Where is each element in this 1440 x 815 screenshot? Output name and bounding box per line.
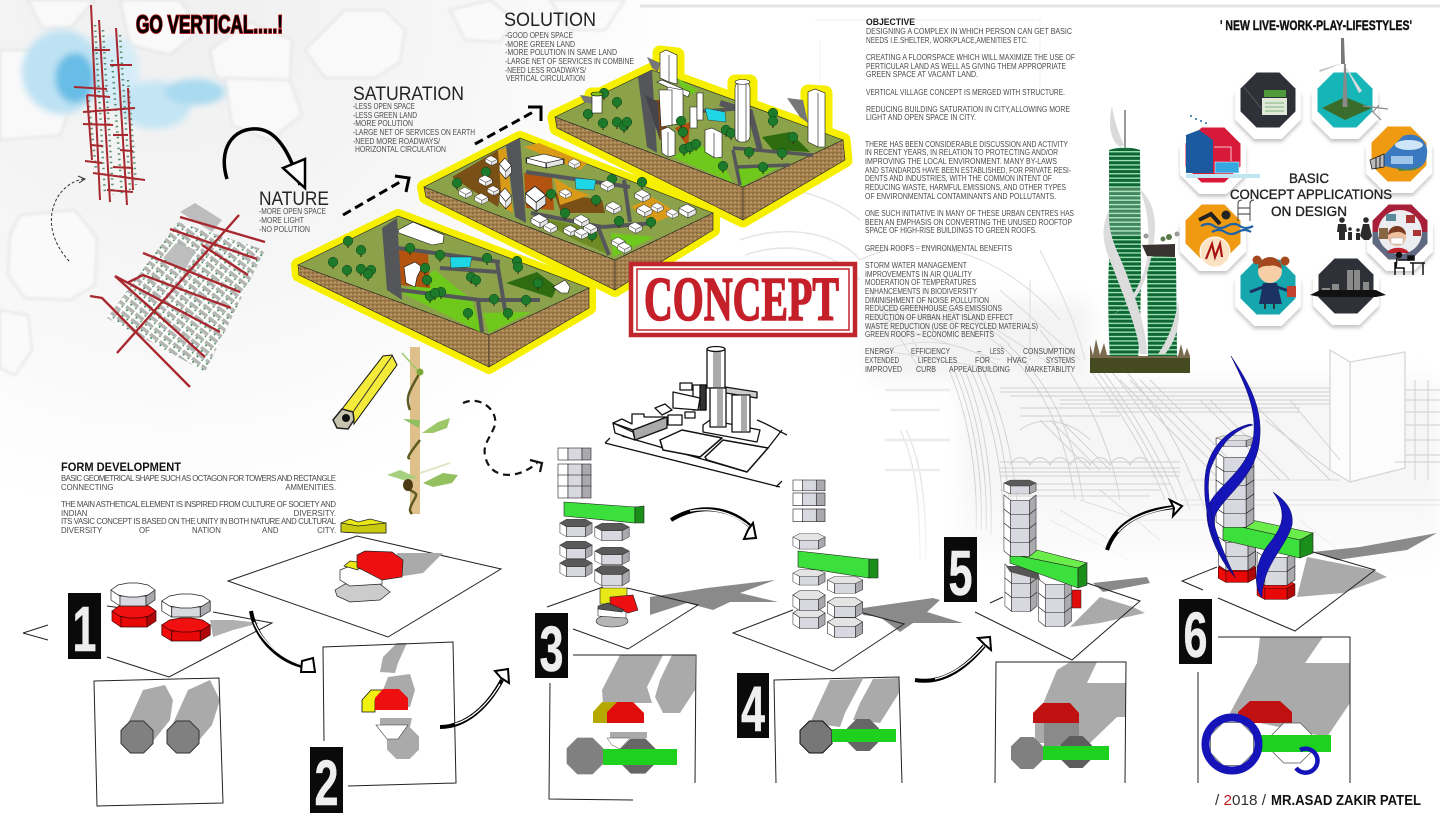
text block: objective: MODERATION OF TEMPERATURES (865, 278, 976, 287)
text: solution: -MORE GREEN LAND (505, 40, 575, 49)
footer: credit: / 2018 / (1215, 793, 1267, 809)
text block: objective: LESS (990, 347, 1004, 356)
text: form development: ITS VASIC CONCEPT IS BASED ON THE UNITY IN BOTH NATURE AND CULTURAL (61, 517, 337, 526)
text: form development: DIVERSITY (61, 526, 103, 535)
dashed arrow: saturation to solution (475, 107, 541, 144)
step 4 massing (733, 480, 963, 671)
site block 3: solution (555, 50, 845, 220)
text block: objective: THERE HAS BEEN CONSIDERABLE DISCUSSION AND ACTIVITY (865, 140, 1069, 149)
text: nature: -MORE LIGHT (259, 216, 304, 225)
text: form development: FORM DEVELOPMENT (61, 460, 182, 474)
text block: objective: SYSTEMS (1046, 356, 1075, 365)
text: form development: CITY. (317, 526, 336, 535)
text block: objective: EXTENDED (865, 356, 899, 365)
heading: basic concept applications on design: BASIC (1289, 171, 1329, 186)
stamp: concept (631, 264, 855, 335)
text block: objective: CREATING A FLOORSPACE WHICH WILL MAXIMIZE THE USE OF (866, 53, 1075, 62)
text block: objective: BEEN AN EMPHASIS ON CONVERTING THE UNUSED ROOFTOP (865, 218, 1072, 227)
text: form development: BASIC GEOMETRICAL SHAPE SUCH AS OCTAGON FOR TOWERS AND RECTANGLE (61, 474, 336, 483)
icon: octagon 1 green sign (1235, 72, 1301, 139)
text: saturation: HORIZONTAL CIRCULATION (355, 145, 446, 154)
site block 2: saturation (424, 138, 713, 290)
icon: octagon 2 wind turbine (1312, 38, 1388, 139)
text: saturation (353, 84, 475, 154)
arrow: step 1 to step 2 (251, 611, 315, 672)
text block: objective: OF ENVIRONMENTAL CONTAMINANTS AND POLLUTANTS. (865, 192, 1056, 201)
text block: objective: SPACE OF HIGH-RISE BUILDINGS TO GREEN ROOFS. (865, 226, 1037, 235)
step badge 3: 3 (540, 613, 564, 685)
text block: objective: VERTICAL VILLAGE CONCEPT IS MERGED WITH STRUCTURE. (866, 88, 1065, 97)
text: form development: AND (262, 526, 279, 535)
text: saturation: -LARGE NET OF SERVICES ON EARTH (353, 128, 475, 137)
text block: objective: REDUCING BUILDING SATURATION IN CITY,ALLOWING MORE (866, 105, 1070, 114)
icon: octagon 8 water building (1180, 115, 1260, 194)
icon: octagon 4 pollution face (1367, 204, 1433, 271)
step 4 plan (774, 677, 902, 783)
step 1 plan (94, 678, 223, 806)
text: form development: NATION (192, 526, 221, 535)
step 2 plan (323, 642, 456, 786)
text: nature: -MORE OPEN SPACE (259, 207, 326, 216)
text block: objective: CONSUMPTION (1023, 347, 1075, 356)
text block: objective: GREEN SPACE AT VACANT LAND. (866, 70, 978, 79)
watercolor cloud (22, 30, 225, 129)
pencil (333, 355, 397, 429)
stamp: concept: CONCEPT (644, 266, 839, 334)
icon: octagon 6 girl (1235, 256, 1301, 326)
step badge 1: 1 (72, 593, 96, 665)
dashed arc arrow (51, 176, 85, 262)
step 3 plan (549, 655, 696, 800)
step 1 massing (23, 583, 272, 677)
text block: objective: APPEAL/BUILDING (949, 365, 1010, 374)
heading: basic concept applications on design: ON DESIGN (1271, 204, 1347, 219)
dashed wavy arrow (463, 401, 542, 475)
text: form development: AMMENITIES. (285, 483, 336, 492)
step 6 massing (1182, 356, 1437, 631)
text block: objective: – (977, 347, 982, 356)
footer: credit (1215, 793, 1421, 809)
text: saturation: -LESS OPEN SPACE (353, 102, 415, 111)
text: solution: -NEED LESS ROADWAYS/ (505, 66, 587, 75)
text block: objective: CURB (916, 365, 936, 374)
text: form development: DIVERSITY. (294, 509, 336, 518)
text: saturation: SATURATION (353, 84, 464, 105)
text: nature (259, 189, 329, 234)
icon: octagon 3 light bulb (1366, 126, 1432, 193)
step badge 6: 6 (1184, 599, 1208, 671)
text block: objective: DENTS AND INDUSTRIES, WITH THE COMMON INTENT OF (865, 174, 1052, 183)
text block: objective (865, 17, 1076, 374)
arrow: step 3 to step 4 (671, 509, 756, 539)
text block: objective: MARKETABILITY (1025, 365, 1076, 374)
background: architectural sketch (640, 6, 1440, 560)
text block: objective: REDUCTION OF URBAN HEAT ISLAND EFFECT (865, 313, 1013, 322)
text: nature: NATURE (259, 189, 329, 210)
text block: objective: REDUCED GREENHOUSE GAS EMISSIONS (865, 304, 1002, 313)
text block: objective: REDUCING WASTE, HARMFUL EMISSIONS, AND OTHER TYPES (865, 183, 1066, 192)
text block: objective: NEEDS I.E.SHELTER, WORKPLACE,AMENITIES ETC. (866, 36, 1028, 45)
text: solution (504, 10, 634, 83)
text block: objective: FOR (975, 356, 990, 365)
icon: family silhouette (1337, 217, 1372, 240)
icon: octagon 7 swimming (1180, 200, 1254, 271)
text: solution: -GOOD OPEN SPACE (505, 31, 573, 40)
text: solution: -MORE POLUTION IN SAME LAND (505, 48, 617, 57)
text block: objective: OBJECTIVE (866, 17, 915, 27)
text block: objective: LIFECYCLES (918, 356, 957, 365)
vertical city grid plan (74, 5, 145, 205)
step badge 5: 5 (948, 537, 972, 609)
text: form development: INDIAN (61, 509, 87, 518)
text block: objective: IMPROVEMENTS IN AIR QUALITY (865, 270, 973, 279)
text block: objective: ONE SUCH INITIATIVE IN MANY OF THESE URBAN CENTRES HAS (865, 209, 1074, 218)
text block: objective: IMPROVING THE LOCAL ENVIRONMENT. MANY BY-LAWS (865, 157, 1057, 166)
icon: octagon 5 skyline (1310, 258, 1386, 325)
text block: objective: IN RECENT YEARS, IN RELATION TO PROTECTING AND/OR (865, 148, 1058, 157)
arrow: step 2 to step 3 (440, 669, 509, 727)
curved black arrow (224, 129, 305, 188)
step 5 massing (975, 480, 1150, 660)
text block: objective: ENERGY (865, 347, 895, 356)
text: form development: CONNECTING (61, 483, 113, 492)
text: nature: -NO POLUTION (259, 225, 310, 234)
text block: objective: EFFICIENCY (911, 347, 951, 356)
dashed arrow: nature to saturation (343, 176, 409, 215)
text block: objective: IMPROVED (865, 365, 902, 374)
text: solution: VERTICAL CIRCULATION (506, 74, 585, 83)
text block: objective: HVAC (1007, 356, 1027, 365)
horizontal city grid plan (90, 203, 265, 387)
text: solution: SOLUTION (504, 10, 596, 31)
site block 1: nature (298, 216, 589, 367)
text block: objective: LIGHT AND OPEN SPACE IN CITY. (866, 113, 976, 122)
step 3 massing (547, 448, 778, 649)
text: solution: -LARGE NET OF SERVICES IN COMBINE (505, 57, 634, 66)
arrow: step 5 to step 6 (1107, 500, 1182, 550)
text block: objective: STORM WATER MANAGEMENT (865, 261, 967, 270)
text block: objective: DESIGNING A COMPLEX IN WHICH PERSON CAN GET BASIC (866, 27, 1072, 36)
icon: person at desk (1395, 252, 1425, 275)
text block: objective: AND STANDARDS HAVE BEEN ESTABLISHED, FOR PRIVATE RESI- (865, 166, 1071, 175)
text block: objective: GREEN ROOFS – ECONOMIC BENEFITS (865, 330, 994, 339)
step 2 massing (228, 519, 501, 637)
text: saturation: -NEED MORE ROADWAYS/ (353, 137, 441, 146)
heading: basic concept applications on design: CONCEPT APPLICATIONS (1230, 187, 1392, 202)
step 6 plan (1198, 637, 1350, 783)
text block: objective: PERTICULAR LAND AS WELL AS GIVING THEM APPROPRIATE (866, 62, 1066, 71)
text block: objective: ENHANCEMENTS IN BIODIVERSITY (865, 287, 978, 296)
green tower render (1090, 106, 1190, 373)
text block: objective: WASTE REDUCTION (USE OF RECYCLED MATERIALS) (865, 322, 1038, 331)
text: saturation: -LESS GREEN LAND (353, 111, 417, 120)
title: go vertical: GO VERTICAL.....! (136, 11, 283, 39)
plant on bamboo pole (387, 347, 458, 514)
step 5 plan (995, 662, 1126, 783)
heading: basic concept applications on design (1230, 171, 1392, 219)
text block: objective: GREEN ROOFS – ENVIRONMENTAL BENEFITS (865, 244, 1012, 253)
arrow: step 4 to step 5 (915, 637, 991, 681)
footer: credit: MR.ASAD ZAKIR PATEL (1271, 793, 1421, 809)
text: form development: THE MAIN ASTHETICAL ELEMENT IS INSPIRED FROM CULTURE OF SOCIETY AND (61, 500, 336, 509)
step badge 4: 4 (741, 673, 765, 745)
model sketch (605, 346, 787, 487)
background: octagon relief pattern (0, 0, 700, 520)
text: saturation: -MORE POLUTION (353, 119, 413, 128)
text: form development (61, 460, 337, 535)
text: form development: OF (139, 526, 150, 535)
text block: objective: DIMINISHMENT OF NOISE POLLUTION (865, 296, 989, 305)
